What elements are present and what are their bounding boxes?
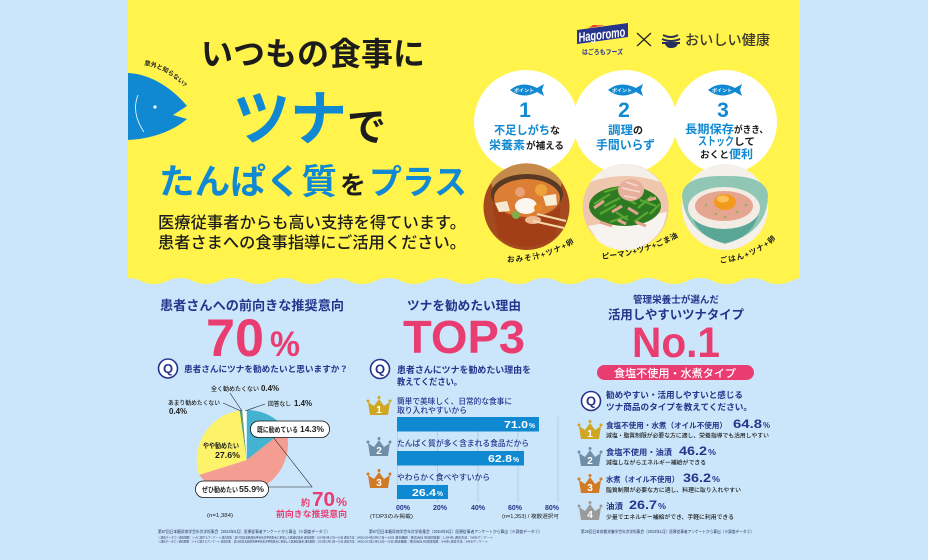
callout: about 70%: 約: [301, 497, 310, 508]
photo: green pepper with tuna: [583, 164, 669, 250]
callout: about 70%: 前向きな推奨意向: [276, 508, 347, 519]
icon: bronze crown: 3: [587, 483, 593, 494]
point 2: 手間いらず: [596, 138, 655, 152]
question 2: 患者さんにツナを勧めたい理由を: [397, 364, 531, 375]
callout: about 70%: [276, 489, 347, 519]
label: definitely: [196, 481, 268, 498]
hero heading: [159, 36, 467, 202]
rank 3: [366, 469, 490, 499]
icon: point badge 1: ポイント: [514, 87, 534, 93]
label: somewhat: [203, 441, 240, 460]
point 3: 3: [717, 99, 729, 122]
rank 2: 62.8: [488, 453, 512, 465]
rank 3: やわらかく食べやすいから: [397, 472, 490, 482]
label: no answer: 回答なし: [268, 400, 291, 408]
source note 2: 2024年5月17日〜19日 調査機関：株式会社 有効回答数：1,384名 調査方法：WEBアンケート: [363, 536, 493, 540]
question 3: Q: [586, 394, 596, 408]
label: somewhat: 27.6%: [215, 451, 240, 460]
label: somewhat: やや勧めたい: [203, 441, 239, 450]
ranking row 4: %: [658, 502, 666, 511]
point 2: 調理: [608, 124, 634, 137]
axis labels: 00%: [396, 505, 411, 512]
hero heading: で: [347, 106, 386, 150]
axis labels: 20%: [433, 505, 448, 512]
ranking row 1: 減塩・脂質制限が必要な方に適し、栄養指導でも活用しやすい: [606, 432, 769, 440]
point 3: おくと: [700, 150, 729, 161]
rank 2: %: [513, 457, 520, 464]
ranking row 3: 水煮（オイル不使用）: [606, 474, 679, 484]
icon: gold crown: 1: [376, 405, 382, 416]
panel: reasons TOP3: [363, 298, 560, 544]
ranking row 4: 26.7: [629, 500, 657, 512]
hero body text: 患者さまへの食事指導にご活用ください。: [158, 234, 466, 252]
icon: blue fish: 意外と知らない?: [144, 60, 187, 86]
sample size: (n=1,384): [207, 513, 233, 519]
axis labels: 80%: [545, 505, 560, 512]
label: no answer: [268, 399, 312, 408]
ranking row 2: %: [708, 448, 716, 457]
rank 2: たんぱく質が多く含まれる食品だから: [397, 438, 529, 448]
rank 1: 簡単で美味しく、日常的な食事に: [397, 396, 512, 406]
label: not at all: 0.4%: [261, 384, 279, 393]
hero heading: を: [340, 172, 366, 200]
ranking row 1: %: [763, 421, 770, 430]
caption: rice bowl: ごはん+ツナ+卵: [720, 235, 775, 263]
big text TOP3: TOP3: [403, 311, 525, 363]
ranking row 2: 減塩しながらエネルギー補給ができる: [606, 458, 706, 466]
ranking row 1: 64.8: [733, 419, 763, 431]
caption: green pepper: ピーマン+ツナ+ごま油: [602, 232, 678, 259]
source note 2: [363, 528, 542, 544]
big number 70%: %: [270, 325, 300, 364]
ranking row 2: 46.2: [679, 446, 707, 458]
label: not really: [168, 399, 220, 416]
note: sample size: (n=1,353) / 複数選択可: [502, 513, 559, 520]
point 2: の: [633, 126, 643, 137]
pill: salt free water type: 食塩不使用・水煮タイプ: [614, 366, 736, 380]
point 1: な: [550, 125, 560, 137]
question 3: [582, 389, 752, 412]
point 3: ストック: [698, 135, 734, 148]
point 1: 不足しがち: [494, 123, 550, 137]
point 2: 2: [618, 99, 630, 122]
question 1: [158, 359, 348, 378]
question 1: 患者さんにツナを勧めたいと思いますか？: [184, 363, 348, 374]
hero heading: ツナ: [233, 86, 347, 153]
icon: gray crown: [578, 501, 602, 521]
label: no answer: 1.4%: [294, 399, 312, 408]
heading: tuna type: 管理栄養士が選んだ: [633, 294, 719, 306]
ranking row 3: [578, 473, 741, 494]
rank 1: 71.0: [504, 419, 528, 431]
point 2: [573, 70, 677, 174]
ranking row 4: 油漬: [606, 501, 623, 511]
point 1: 1: [519, 99, 531, 122]
ranking row 4: 少量でエネルギー補給ができ、手軽に利用できる: [606, 513, 734, 521]
source note 2: 第67回日本糖尿病学会年次学術集会（2024年5月）医療従事者アンケートから算出（※調査データ①）: [369, 528, 542, 535]
label: not really: あまり勧めたくない: [168, 399, 220, 407]
ranking row 1: [578, 419, 770, 440]
logo: Hagoromo: はごろもフーズ: [582, 47, 623, 56]
label: already recommending: 14.3%: [300, 425, 324, 434]
source note 1: ＜調査データ②＞調査概要：ツナに関するアンケート 調査対象：第26回日本病態栄養学会年次学術集会に来場した医療従事者 調査期間：2023年1月13日〜15日 調査方法：WEB: [158, 540, 363, 544]
rank 2: [366, 437, 529, 466]
point 3: 便利: [729, 147, 753, 161]
caption: miso soup: おみそ汁+ツナ+卵: [508, 238, 574, 262]
label: not really: 0.4%: [169, 407, 187, 416]
hero body text: [158, 214, 466, 252]
icon: gray crown: 4: [587, 510, 593, 521]
hero heading: たんぱく質: [159, 163, 337, 202]
hero heading: プラス: [369, 164, 467, 202]
point 3: [673, 70, 777, 174]
source note 1: 第67回日本糖尿病学会年次学術集会（2024年5月）医療従事者アンケートから算出（※調査データ①）: [158, 528, 330, 535]
label: already recommending: 既に勧めている: [257, 425, 298, 434]
question 2: Q: [375, 362, 385, 376]
ranking row 4: [578, 500, 734, 521]
ranking row 3: 36.2: [683, 473, 711, 485]
icon: bronze crown: [578, 474, 602, 494]
point 1: 栄養素: [489, 138, 526, 152]
big number 70%: 70: [206, 309, 264, 368]
point 3: して: [734, 137, 755, 148]
cross mark: [637, 33, 651, 46]
source note 1: ＜調査データ①＞調査概要：ツナに関するアンケート 調査対象：第67回日本糖尿病学会年次学術集会に来場した医療従事者 調査期間：2024年5月17日〜19日 調査方法：WEB: [158, 536, 363, 540]
label: not at all: 全く勧めたくない: [211, 385, 259, 393]
heading: reasons: ツナを勧めたい理由: [407, 298, 521, 313]
icon: bronze crown: 3: [376, 478, 382, 489]
icon: silver crown: 2: [587, 456, 593, 467]
point 1: [474, 70, 578, 174]
panel: tuna type No.1: [578, 294, 770, 535]
question 3: 勧めやすい・活用しやすいと感じる: [606, 389, 743, 400]
point 1: が補える: [526, 140, 564, 152]
icon: gold crown: 1: [587, 429, 593, 440]
heading: tuna type: [608, 294, 745, 322]
rank 3: %: [437, 491, 444, 498]
ranking row 3: %: [712, 475, 720, 484]
axis labels: 40%: [471, 505, 486, 512]
hero heading: いつもの食事に: [201, 36, 425, 72]
heading: recommendation: 患者さんへの前向きな推奨意向: [160, 298, 344, 313]
heading: tuna type: 活用しやすいツナタイプ: [608, 307, 745, 322]
label: already recommending: [250, 421, 330, 438]
ranking row 1: 食塩不使用・水煮（オイル不使用）: [606, 420, 727, 430]
label: definitely: 55.9%: [239, 485, 264, 494]
rank 1: 取り入れやすいから: [397, 406, 467, 415]
rank 1: [366, 396, 539, 432]
big text No.1: No.1: [632, 319, 720, 367]
ranking row 2: [578, 446, 716, 467]
icon: point badge 3: ポイント: [712, 87, 732, 93]
question 1: Q: [163, 361, 173, 376]
callout: about 70%: %: [336, 495, 347, 509]
note: top 3 only: (TOP3のみ掲載): [370, 513, 413, 520]
rank 3: 26.4: [412, 487, 436, 499]
icon: point badge 2: ポイント: [612, 87, 632, 93]
question 3: ツナ商品のタイプを教えてください。: [606, 401, 752, 412]
icon: silver crown: 2: [376, 446, 382, 457]
panel: recommendation 70%: [158, 298, 363, 544]
label: not at all: [211, 384, 279, 393]
logo: Hagoromo: [577, 23, 628, 56]
ranking row 3: 脂質制限が必要な方に適し、料理に取り入れやすい: [606, 486, 741, 494]
hero body text: 医療従事者からも高い支持を得ています。: [158, 214, 466, 232]
photo: miso soup: [484, 163, 570, 250]
source note 1: [158, 528, 363, 544]
label: definitely: ぜひ勧めたい: [202, 485, 238, 494]
rank 1: %: [529, 423, 536, 430]
logo: Hagoromo: Hagoromo: [578, 24, 626, 45]
pie chart: [168, 384, 330, 498]
icon: gold crown: [366, 396, 392, 416]
axis labels: [396, 505, 560, 512]
point 3: 長期保存: [685, 122, 735, 136]
panel: yellow hero: [128, 0, 800, 284]
bar chart: [366, 396, 560, 512]
big number 70%: [206, 309, 300, 368]
question 2: 教えてください。: [397, 376, 462, 387]
question 2: [370, 360, 531, 387]
pill: salt free water type: [597, 365, 754, 380]
icon: silver crown: [366, 437, 392, 457]
ranking row 2: 食塩不使用・油漬: [606, 447, 672, 457]
logo: oishii kenko: おいしい健康: [685, 32, 770, 49]
axis labels: 60%: [508, 505, 523, 512]
point 3: がきき、: [734, 124, 768, 136]
icon: gold crown: [578, 420, 602, 440]
photo: rice bowl with tuna and egg: [682, 164, 768, 250]
source note 2: 2023年1月13日〜15日 調査機関：株式会社 有効回答数：548名 調査方法：WEBアンケート: [363, 540, 488, 544]
callout: about 70%: 70: [312, 489, 335, 511]
icon: blue fish: [128, 60, 187, 140]
source note 3: 第26回日本病態栄養学会年次学術集会（2023年1月）医療従事者アンケートから算出（※調査データ②）: [581, 528, 754, 535]
